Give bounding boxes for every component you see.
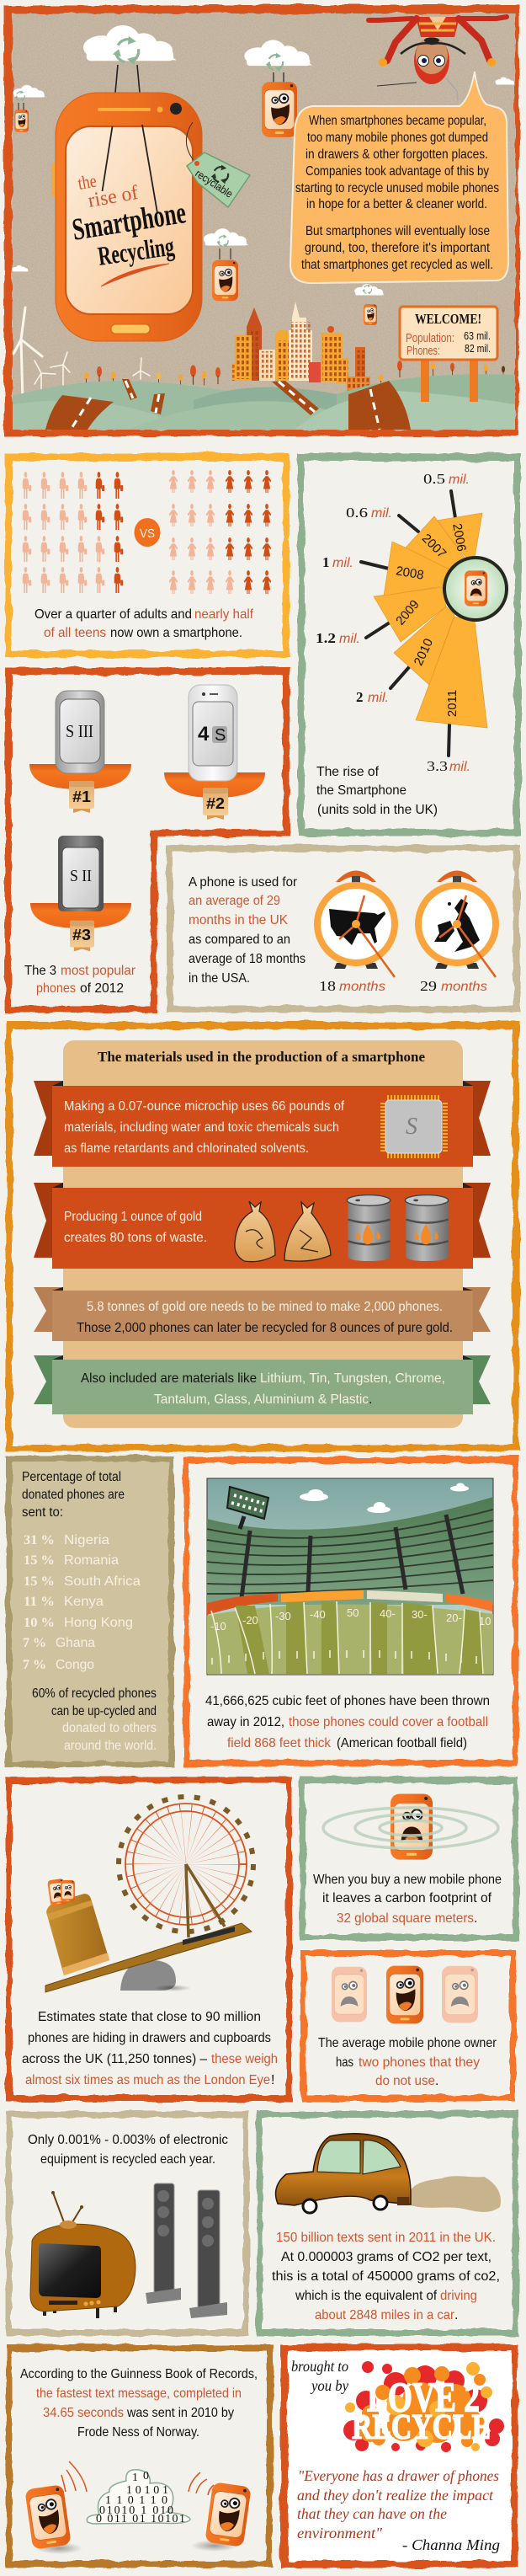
phone #2 iPhone 4S: 4 [198,723,210,746]
seesaw with cabinet and phones [45,1879,252,1992]
icon: microchip: S [406,1114,417,1140]
panel: fastest text message [6,2344,273,2568]
character: upside-down red devil [369,17,507,101]
adults vs teens caption: now own a smartphone. [110,626,242,640]
speech bubble: in drawers & other forgotten places. [306,147,488,162]
binary cloud: 1 1 0 1 1 0 [105,2494,167,2507]
tan backing card [63,1040,463,1428]
donated heading: Percentage of total [22,1470,121,1484]
logo: Love 2 Recycle: LOVE 2 [367,2373,480,2420]
adults vs teens caption: of all teens [44,626,106,640]
wedge year labels: 2007 [419,532,449,561]
title: the [77,169,98,194]
country list [23,1533,141,1672]
logo: Love 2 Recycle [343,2361,504,2452]
flying phone D [354,284,384,325]
usage text: as compared to an [189,933,290,947]
London Eye caption [22,2010,278,2087]
field caption: those phones could cover a football [289,1715,488,1729]
stadium floodlight [227,1487,268,1529]
clock labels: months [441,980,487,994]
phone #2 iPhone 4S: #2 [206,795,225,812]
ribbon: other materials: Lithium, Tin, Tungsten, Chrome, [260,1371,445,1386]
speech bubble: too many mobile phones got dumped [307,131,488,145]
carbon caption: When you buy a new mobile phone [313,1873,502,1887]
welcome sign: Phones: [406,344,440,358]
ribbon: gold ore: Those 2,000 phones can later be recycled for 8 ounces of pure gold. [77,1321,453,1335]
value labels: mil. [339,632,360,646]
cloud with recycle icon above big phone [83,25,177,93]
ribbon: gold ore: 5.8 tonnes of gold ore needs to be mined to make 2,000 phones. [87,1300,443,1314]
speech bubble: But smartphones will eventually lose [306,224,490,238]
unused phones caption: two phones that they [359,2055,480,2070]
small clouds [12,77,515,271]
flying phone B [13,85,45,132]
country list: Kenya [64,1595,104,1609]
adults vs teens caption: nearly half [194,607,254,622]
value labels: mil. [449,760,470,774]
panel: phone usage duration [167,845,520,1013]
phone #3 Galaxy SII: #3 [72,927,91,943]
London Eye caption: these weigh [211,2052,278,2066]
top phones caption: The 3 [24,964,56,978]
top phones caption [24,964,136,996]
unused phones caption: . [435,2074,438,2088]
car caption: At 0.000003 grams of CO2 per text, [281,2250,491,2264]
country list: 31 % [24,1533,55,1547]
unused phones caption: do not use [375,2074,435,2088]
illustration: stadium: -20 [242,1614,258,1627]
chart caption: The rise of [316,765,380,779]
brought to you by: you by [310,2377,348,2394]
clock labels: 18 [319,978,336,994]
illustration: car with exhaust [276,2134,501,2213]
field caption: field 868 feet thick [227,1736,332,1750]
Guinness caption: Frode Ness of Norway. [77,2425,199,2440]
top phones caption: phones [36,981,76,996]
welcome sign [400,307,497,402]
speech bubble: When smartphones became popular, [309,114,486,128]
speech bubble: Companies took advantage of this by [306,164,489,179]
top phones caption: of 2012 [80,981,124,996]
field caption: 41,666,625 cubic feet of phones have been thrown [205,1694,490,1708]
winding roads [45,379,411,430]
illustration: stadium: 20- [446,1611,462,1624]
icon: waste bags [235,1201,331,1262]
quote: - Channa Ming [402,2536,500,2553]
wedge year labels: 2009 [393,597,422,628]
icon: speakers [146,2183,227,2318]
electronics caption: Only 0.001% - 0.003% of electronic [28,2133,228,2147]
wedge year labels: 2006 [449,522,469,553]
value labels [316,471,470,774]
unused phones caption [318,2036,497,2088]
quote: and they don't realize the impact [297,2487,494,2504]
carbon caption [313,1873,502,1926]
Guinness caption: 34.65 seconds [43,2406,124,2420]
illustration: stadium: 40- [380,1607,396,1620]
panel: donated phones percentages [6,1456,174,1767]
binary cloud [87,2470,190,2525]
wedge year labels: 2008 [395,564,425,583]
ribbon: gold waste: creates 80 tons of waste. [64,1231,207,1245]
usage text: months in the UK [189,913,288,927]
ribbon: other materials: . [369,1392,372,1407]
ribbon: microchip: materials, including water and toxic chemicals such [64,1120,339,1135]
welcome sign: Population: [406,331,454,345]
binary cloud: 1 [132,2472,138,2484]
speech bubble: in hope for a better & cleaner world. [306,197,487,211]
stadium clouds [300,1483,469,1513]
speech bubble: that smartphones get recycled as well. [301,258,493,272]
wedge year labels: 2011 [445,690,460,717]
title: Smartphone [70,195,189,248]
welcome sign: WELCOME! [415,311,481,327]
country list: Hong Kong [64,1616,133,1630]
up-cycled note: 60% of recycled phones [32,1686,157,1701]
VS badge: VS [140,526,155,541]
icon: oil barrels [347,1194,449,1261]
adults vs teens caption: Over a quarter of adults and [35,607,192,622]
brought to you by [291,2358,348,2394]
chart caption: the Smartphone [316,783,406,798]
quote: that they can have on the [297,2505,447,2522]
car caption: 150 billion texts sent in 2011 in the UK. [276,2231,496,2245]
quote: "Everyone has a drawer of phones [298,2467,499,2484]
ribbon: other materials [34,1355,491,1414]
clock labels: 29 [420,978,437,994]
icon: big orange smartphone [51,93,202,341]
field caption: (American football field) [337,1736,467,1750]
field stripes [236,1601,484,1674]
London Eye caption: almost six times as much as the London Eye [25,2073,270,2087]
country list: Romania [64,1553,119,1568]
London Eye caption: phones are hiding in drawers and cupboards [28,2031,271,2045]
ribbon: gold waste: Producing 1 ounce of gold [64,1210,202,1224]
two talking phones [24,2461,252,2554]
quote [297,2467,500,2553]
phone #1 Galaxy SIII: #1 [72,788,91,805]
country list: South Africa [64,1574,141,1589]
Guinness caption: According to the Guinness Book of Records, [20,2367,258,2381]
top phones caption: most popular [61,964,136,978]
flying phone A [244,40,312,137]
wedge year labels: 2010 [412,636,436,668]
binary cloud: 01010 1 010 [99,2504,173,2517]
phone with ripples [323,1793,498,1860]
car caption: this is a total of 450000 grams of co2, [272,2269,500,2284]
donated heading: sent to: [22,1505,63,1520]
clock labels [319,978,487,994]
tick marks [361,491,455,756]
country list: Congo [56,1658,94,1672]
wedge year labels [393,522,469,717]
carbon caption: 32 global square meters [337,1911,474,1926]
illustration: stadium: 10 [479,1615,491,1627]
unused phones caption: The average mobile phone owner [318,2036,497,2050]
magnifier with scared phone [444,558,507,620]
car caption: driving [440,2289,477,2303]
icon: retro television [30,2191,135,2318]
country list: 10 % [24,1616,55,1630]
up-cycled note: can be up-cycled and [51,1704,157,1718]
value labels: 1 [322,554,330,570]
panel: materials used [6,1022,519,1451]
illustration: stadium: 30- [412,1608,428,1621]
electronics caption [28,2133,228,2167]
chart caption: (units sold in the UK) [317,803,438,817]
donated heading: donated phones are [22,1488,125,1502]
materials heading: The materials used in the production of a smartphone [98,1049,425,1065]
usage text: in the USA. [189,971,250,986]
usage text: A phone is used for [189,875,298,890]
country list: 7 % [23,1658,46,1672]
green hills [13,374,515,430]
donated heading [22,1470,125,1520]
adults vs teens caption [35,607,254,640]
London Eye caption: across the UK (11,250 tonnes) – [22,2052,207,2066]
panel: two unused phones [300,1950,516,2102]
car caption: . [454,2308,458,2322]
Guinness caption [20,2367,258,2440]
value labels: 3.3 [427,758,448,774]
speech bubble [290,72,508,283]
ribbon: other materials: Tantalum, Glass, Aluminium & Plastic [154,1392,369,1407]
phone #1 Galaxy SIII [29,691,131,813]
London Eye caption: ! [271,2073,274,2087]
phone #2 iPhone 4S [164,685,265,820]
welcome sign: 63 mil. [464,329,491,342]
up-cycled note: around the world. [64,1739,157,1753]
title [70,169,189,286]
usage text [189,875,306,986]
illustration: stadium [207,1478,493,1675]
speech bubble: ground, too, therefore it's important [305,241,490,255]
city skyline [231,302,370,393]
panel: carbon footprint [300,1777,518,1941]
value labels: 0.6 [346,505,368,521]
ribbon: microchip: as flame retardants and chlorinated solvents. [64,1141,309,1156]
panel: rise of the smartphone fan chart [298,453,521,836]
pictogram: adults [23,472,123,593]
pictogram: teens [169,470,271,594]
brought to you by: brought to [291,2358,348,2375]
binary cloud: 0 [143,2470,149,2482]
illustration: stadium: -40 [310,1608,326,1621]
value labels: 1.2 [316,630,336,646]
ribbon: other materials: Also included are materials like [81,1371,257,1386]
panel: texts and car emissions [257,2111,518,2336]
clock: UK [418,871,496,977]
carbon caption: . [474,1911,477,1926]
phone #3 Galaxy SII: S II [70,867,92,885]
flying phone C [204,228,248,301]
up-cycled note [32,1686,157,1753]
chart caption [316,765,438,817]
phone #3 Galaxy SII [30,836,131,951]
up-cycled note: donated to others [62,1721,157,1735]
trees along the horizon [84,361,505,387]
Guinness caption: was sent in 2010 by [126,2406,234,2420]
ribbon: microchip [34,1081,491,1167]
VS badge [135,518,160,547]
country list: Ghana [56,1636,95,1650]
title: Recycling [96,231,176,271]
field caption: away in 2012, [207,1715,284,1729]
country list: Nigeria [64,1533,109,1547]
panel: 3 most popular phones [5,667,290,1013]
panel: hero header [4,5,519,436]
recyclable tag [186,122,250,207]
value labels: mil. [449,473,470,487]
phone #2 iPhone 4S: S [215,726,226,745]
title: rise of [87,182,140,212]
recyclable tag: recyclable [193,167,235,200]
usage text: an average of 29 [189,894,280,908]
country list: 11 % [24,1595,55,1609]
electronics caption: equipment is recycled each year. [40,2152,215,2167]
illustration: stadium: -30 [275,1610,291,1622]
country list: 7 % [23,1636,46,1650]
wind turbines [13,307,150,402]
phone #1 Galaxy SIII: S III [66,721,93,741]
panel: brought to you by Love 2 Recycle [280,2344,518,2568]
ribbon: microchip: Making a 0.07-ounce microchip uses 66 pounds of [64,1099,345,1114]
panel: electronics recycled [6,2111,249,2336]
panel: London Eye comparison [6,1777,292,2102]
illustration: London Eye [119,1797,253,1937]
field caption [205,1694,490,1750]
binary cloud: 1 0 1 0 1 [126,2484,168,2497]
binary cloud: 0 011 01 10101 [96,2513,185,2525]
ribbon: gold ore [34,1287,491,1341]
icon: microchip [383,1098,445,1156]
value labels: mil. [371,506,392,521]
fan wedges [374,513,487,728]
clock labels: months [339,980,385,994]
illustration: stadium: -10 [210,1620,226,1633]
illustration: stadium: 50 [347,1606,359,1619]
value labels: mil. [332,556,353,570]
panel: football field [183,1456,518,1766]
value labels: 2 [356,689,364,705]
car caption: about 2848 miles in a car [315,2308,455,2322]
ribbon: gold waste [34,1183,491,1269]
carbon caption: it leaves a carbon footprint of [322,1891,492,1905]
clock: USA [317,871,395,977]
Guinness caption: the fastest text message, completed in [36,2386,242,2401]
welcome sign: 82 mil. [465,342,491,355]
logo: Love 2 Recycle: RECYCLE [352,2408,491,2447]
three phone faces [332,1966,478,2023]
value labels: 0.5 [423,471,445,487]
unused phones caption: has [336,2055,353,2070]
panel: adults vs teens [5,453,290,657]
quote: environment" [297,2525,382,2541]
value labels: mil. [368,691,389,705]
usage text: average of 18 months [189,952,306,966]
car caption: which is the equivalent of [295,2289,438,2303]
country list: 15 % [24,1574,55,1589]
London Eye caption: Estimates state that close to 90 million [38,2010,261,2024]
car caption [272,2231,500,2322]
country list: 15 % [24,1553,55,1568]
